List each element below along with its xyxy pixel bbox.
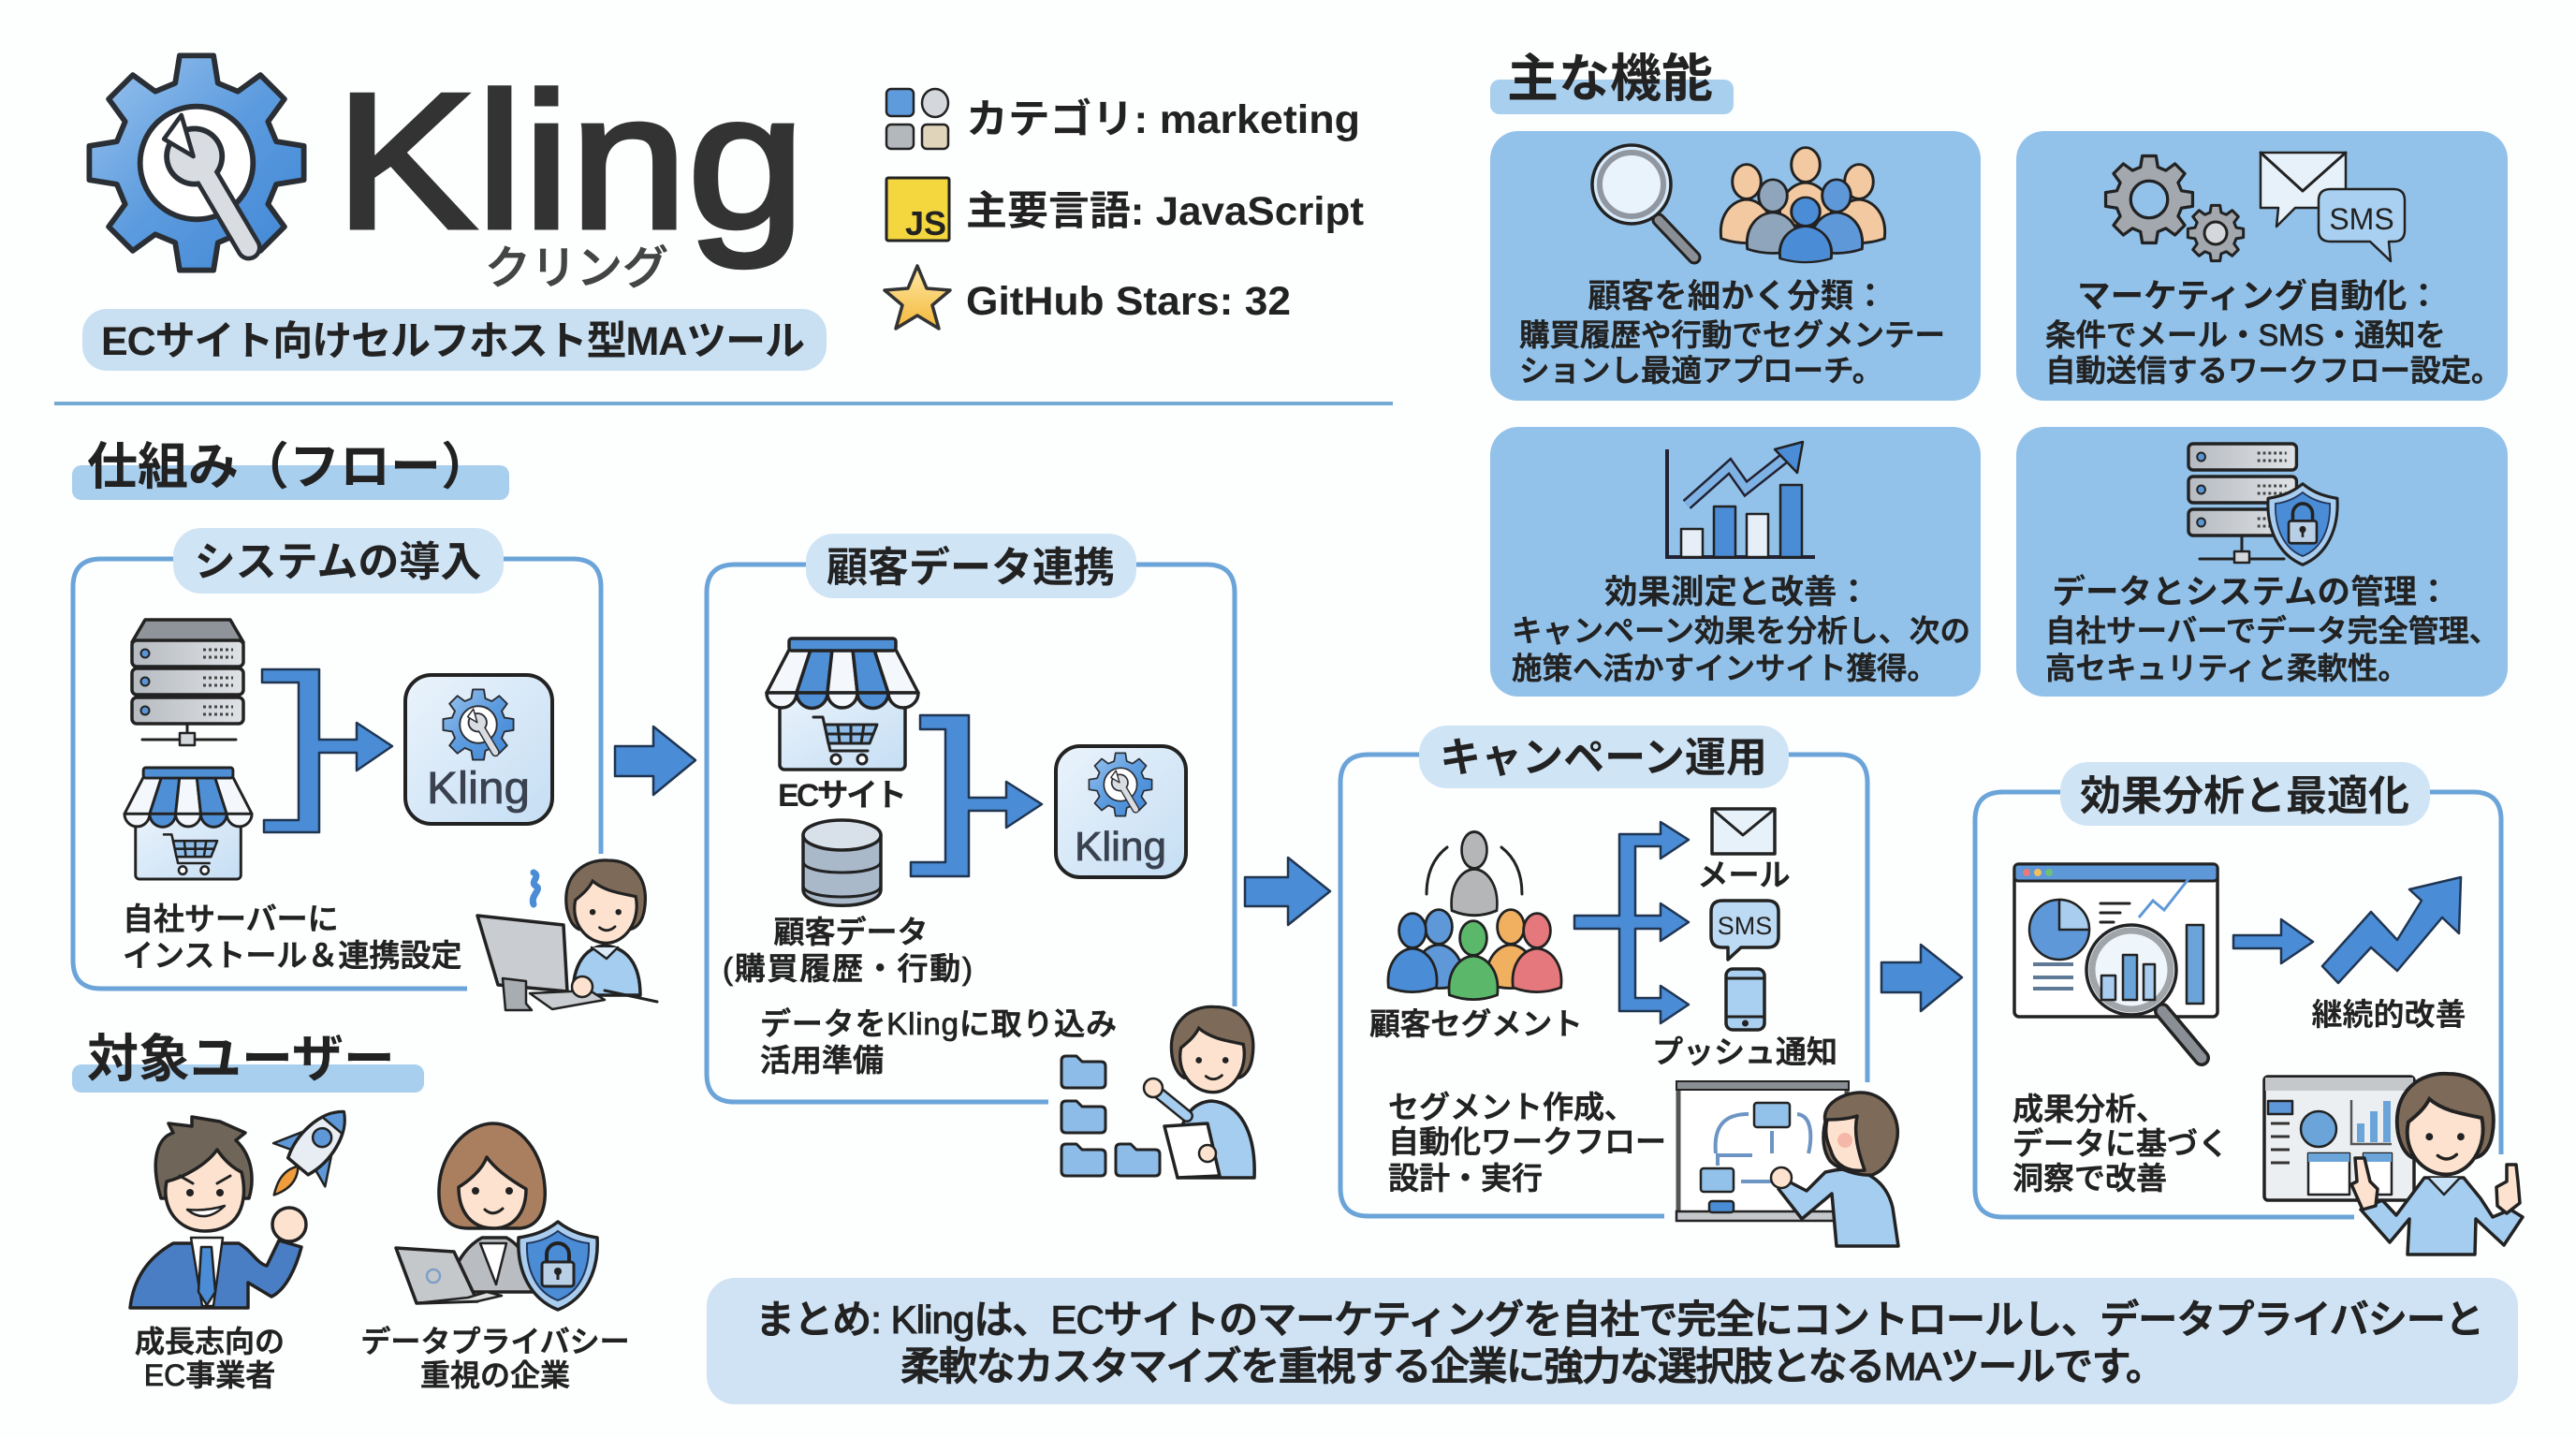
panel: feature segmentation: 顧客を細かく分類： [1588,277,1887,315]
panel: feature segmentation [1490,131,1981,401]
logo gear icon [89,55,304,271]
label: プッシュ通知 [1652,1034,1837,1069]
icon: growth chart [1667,442,1815,557]
heading: features: 主な機能 [1507,50,1713,108]
step heading: システムの導入 [195,539,481,585]
arrow: branches to channels [1574,822,1689,1023]
label [723,915,973,986]
caption: セグメント作成、 [1388,1090,1635,1124]
icon: customer segments [1388,831,1561,1000]
caption: 自社サーバーに [123,902,339,936]
panel: feature data management: 高セキュリティと柔軟性。 [2045,652,2408,685]
step heading [1419,726,1789,788]
icon: secure server [2188,444,2337,565]
icon: server [132,620,243,745]
caption: データをKlingに取り込み [760,1006,1117,1041]
caption: 設計・実行 [1388,1161,1543,1196]
illustration: engineer at computer [477,860,657,1010]
title reading: クリング [485,243,668,294]
icon: gears [2106,156,2244,261]
icon: laptop [396,1248,502,1303]
summary box: 柔軟なカスタマイズを重視する企業に強力な選択肢となるMAツールです。 [900,1344,2165,1388]
arrow: step 2 to 3 [1245,858,1330,925]
panel: step 1 system install [73,528,657,1010]
meta: language: 主要言語: JavaScript [966,189,1364,234]
label: メール [1698,858,1790,892]
panel: step 3 campaign [1340,726,1898,1246]
meta: language [886,178,1364,242]
icon: customer group [1720,148,1885,262]
icon: smartphone [1726,969,1764,1030]
arrow: step 3 to 4 [1881,945,1962,1011]
arrow: merge to Kling [911,715,1042,876]
icon: database [803,820,881,905]
card: Kling app: Kling [427,764,530,814]
illustration: person thumbs up [2351,1074,2523,1255]
meta: stars: GitHub Stars: 32 [966,279,1291,324]
card: Kling app: Kling [1075,824,1166,870]
panel: feature segmentation: ションし最適アプローチ。 [1519,354,1882,388]
icon: folders [1061,1056,1160,1176]
icon: SMS bubble [1711,901,1778,960]
caption: 重視の企業 [420,1358,570,1392]
step heading [173,528,504,594]
label: ECサイト [778,778,907,814]
panel: step 4 analysis [1975,762,2523,1255]
label: (購買履歴・行動) [723,951,973,986]
step heading: キャンペーン運用 [1440,735,1767,781]
caption [1388,1090,1666,1196]
panel: feature measurement: 施策へ活かすインサイト獲得。 [1512,652,1938,685]
arrow: merge to Kling [262,669,392,832]
icon: rocket [248,1090,370,1217]
heading: flow: 仕組み（フロー） [87,439,491,495]
heading: target users: 対象ユーザー [87,1030,395,1088]
step heading: 顧客データ連携 [827,545,1115,591]
target user: growth EC merchant [130,1090,370,1392]
caption: 洞察で改善 [2012,1161,2167,1196]
caption: EC事業者 [144,1358,275,1392]
illustration: businessman [130,1117,306,1308]
panel: feature data management: データとシステムの管理： [2053,573,2450,610]
summary box [707,1278,2518,1404]
icon: JS badge: JS [905,204,946,242]
icon: EC store [767,638,918,770]
caption: インストール＆連携設定 [123,938,461,973]
icon: JS badge [886,178,949,242]
caption: データプライバシー [360,1325,630,1358]
icon: shield [519,1222,597,1310]
subtitle pill: ECサイト向けセルフホスト型MAツール [101,319,805,364]
illustration: mini dashboard [2264,1077,2414,1200]
panel: feature data management [2016,427,2508,697]
illustration: person at whiteboard [1771,1093,1898,1246]
step heading: 効果分析と最適化 [2080,773,2409,819]
label: 顧客データ [773,915,929,949]
icon: SMS bubble: SMS [1718,912,1772,940]
meta: category [886,89,1360,149]
step heading [806,534,1136,598]
panel: feature measurement: 効果測定と改善： [1604,573,1870,610]
caption: 活用準備 [760,1043,884,1078]
icon: SMS bubble: SMS [2329,202,2394,236]
summary box: まとめ: Klingは、ECサイトのマーケティングを自社で完全にコントロールし、データプライバシーと [755,1298,2484,1342]
caption: 成長志向の [135,1325,285,1358]
card: Kling app [1056,746,1186,877]
caption [123,902,461,973]
panel: feature data management: 自社サーバーでデータ完全管理、 [2045,614,2499,648]
illustration: whiteboard [1676,1081,1849,1221]
caption: 成果分析、 [2012,1092,2167,1126]
arrow: step 1 to 2 [615,726,695,795]
meta: category: カテゴリ: marketing [966,97,1360,142]
icon: zigzag growth arrow [2322,877,2461,983]
caption [135,1325,285,1392]
arrow: to improvement [2233,919,2313,963]
panel: feature automation: 条件でメール・SMS・通知を [2045,318,2446,352]
panel: feature automation [2016,131,2508,401]
title: Kling: Kling [335,53,805,269]
icon: star [885,266,950,329]
panel: feature segmentation: 購買履歴や行動でセグメンテー [1519,318,1945,352]
target user: privacy-focused company [360,1123,630,1392]
icon: category tiles [886,89,948,149]
card: Kling app [405,675,552,824]
meta: stars [885,266,1291,329]
illustration: person with clipboard [1144,1006,1254,1178]
panel: feature measurement [1490,427,1981,697]
caption [760,1006,1117,1078]
panel: feature measurement: キャンペーン効果を分析し、次の [1512,614,1970,648]
caption [360,1325,630,1392]
illustration: businesswoman [439,1123,545,1292]
panel: step 2 customer data [707,534,1254,1178]
icon: SMS bubble [2319,189,2405,261]
caption [2012,1092,2229,1196]
caption: データに基づく [2012,1126,2229,1161]
icon: dashboard with magnifier [2014,864,2217,1058]
icon: mail bubble [2261,153,2346,227]
subtitle pill [82,309,827,371]
label: 顧客セグメント [1369,1007,1583,1041]
panel: feature automation: マーケティング自動化： [2077,277,2440,315]
icon: mail [1712,809,1775,854]
panel: feature automation: 自動送信するワークフロー設定。 [2045,354,2502,388]
step heading [2060,762,2430,826]
label: 継続的改善 [2312,997,2466,1032]
caption: 自動化ワークフロー [1388,1124,1666,1159]
icon: EC store [124,768,252,879]
icon: magnifier [1592,145,1694,257]
